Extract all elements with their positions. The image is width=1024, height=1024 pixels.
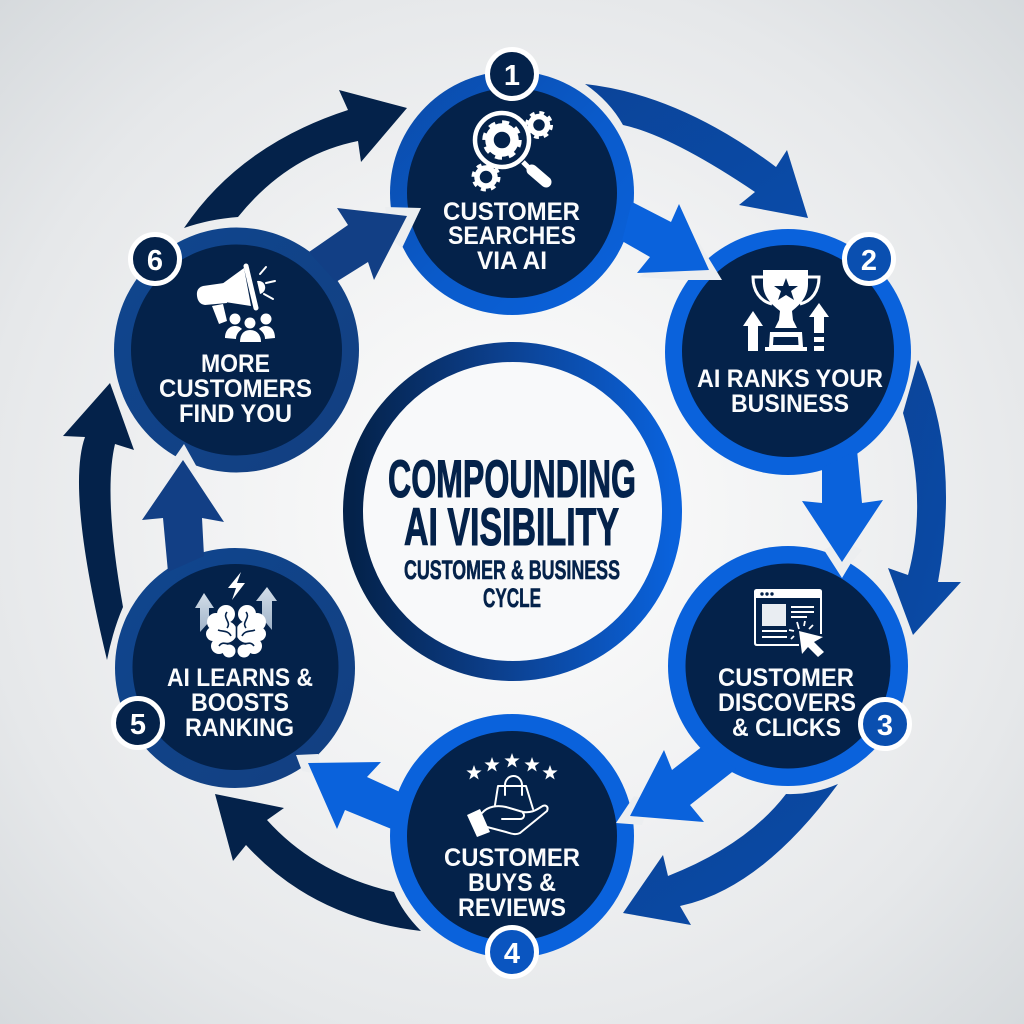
panel: step 6 more customers find you	[114, 228, 359, 472]
badge 6: 6	[147, 245, 163, 277]
arrow: inner step 3 to 4	[630, 745, 736, 822]
badge 4	[488, 928, 536, 976]
panel: step 3 customer discovers and clicks	[668, 546, 910, 786]
icon: magnifier with gears	[474, 113, 551, 190]
step 3 label: CUSTOMER	[718, 664, 854, 692]
arrow: inner step 1 to 2	[622, 202, 709, 273]
step 2 label	[697, 365, 883, 418]
step 3 label	[718, 664, 856, 742]
step 1 label	[443, 198, 580, 275]
step 5 label: RANKING	[185, 714, 294, 742]
step 6 label: FIND YOU	[179, 400, 292, 428]
arrow: outer step 5 to 6	[63, 383, 134, 660]
step 2 label: AI RANKS YOUR	[697, 365, 883, 393]
icon: brain with lightning and arrows	[195, 572, 277, 658]
step 4 label: BUYS &	[468, 869, 556, 897]
badge 1	[488, 50, 536, 98]
badge 2	[844, 234, 894, 284]
step 5 label: AI LEARNS &	[167, 664, 313, 692]
step 1 label: CUSTOMER	[443, 198, 580, 226]
step 4 label: CUSTOMER	[444, 844, 580, 872]
subtitle: CYCLE	[483, 583, 541, 613]
badge 5	[114, 698, 162, 748]
arrow: outer step 6 to 1	[184, 90, 407, 228]
badge 2: 2	[861, 245, 877, 277]
badge 3	[860, 700, 910, 748]
panel: step 4 customer buys and reviews	[390, 714, 634, 976]
step 5 label	[167, 664, 313, 742]
step 6 label: CUSTOMERS	[159, 375, 312, 403]
arrow: outer step 1 to 2	[585, 84, 808, 218]
step 6 label: MORE	[201, 350, 270, 378]
arrow: inner step 5 to 6	[142, 460, 224, 572]
panel: step 5 AI learns and boosts ranking	[114, 548, 355, 788]
icon: hand with shopping bag and stars	[466, 753, 558, 837]
arrow: inner step 6 to 1	[309, 208, 407, 282]
step 5 label: BOOSTS	[191, 689, 289, 717]
step 2 label: BUSINESS	[731, 390, 849, 418]
badge 4: 4	[504, 938, 520, 970]
step 3 label: & CLICKS	[732, 714, 841, 742]
arrow: outer step 3 to 4	[623, 784, 838, 925]
subtitle: CUSTOMER & BUSINESS	[404, 555, 620, 585]
panel: step 1 customer searches	[390, 50, 634, 315]
panel: step 2 AI ranks your business	[665, 229, 911, 475]
title	[388, 450, 636, 557]
step 1 label: SEARCHES	[448, 222, 576, 250]
title: COMPOUNDING	[388, 450, 636, 509]
icon: browser window with cursor	[754, 589, 824, 657]
step 4 label	[444, 844, 580, 922]
icon: megaphone with people	[197, 266, 275, 342]
step 1 label: VIA AI	[477, 247, 547, 275]
step 4 label: REVIEWS	[458, 894, 566, 922]
badge 1: 1	[504, 60, 520, 92]
arrow: inner step 4 to 5	[308, 762, 402, 830]
badge 6	[130, 234, 180, 284]
badge 3: 3	[877, 710, 893, 742]
arrow: outer step 2 to 3	[888, 360, 961, 635]
subtitle	[404, 555, 620, 613]
icon: trophy with arrows	[743, 270, 829, 351]
panel: central title ring	[353, 352, 672, 671]
arrow: outer step 4 to 5	[215, 794, 421, 931]
step 3 label: DISCOVERS	[718, 689, 856, 717]
arrow: inner step 2 to 3	[802, 450, 883, 562]
badge 5: 5	[130, 709, 146, 741]
step 6 label	[159, 350, 312, 428]
title: AI VISIBILITY	[404, 498, 619, 557]
